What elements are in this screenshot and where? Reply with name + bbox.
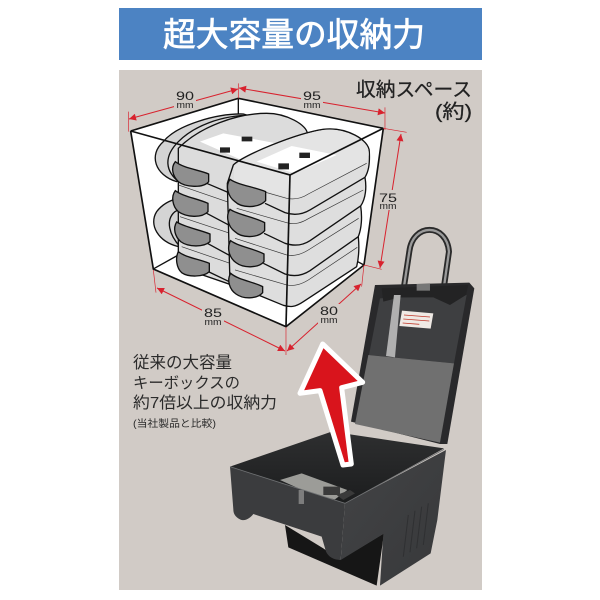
lid hinge bracket xyxy=(382,285,468,305)
cube back edges xyxy=(153,98,364,269)
heading: storage space xyxy=(356,79,472,123)
dimension label: 80 mm: mm xyxy=(320,315,338,326)
right outer face xyxy=(341,450,446,586)
dimension label: 95 mm: mm xyxy=(304,100,321,111)
dimension label: 75 mm: mm xyxy=(380,201,397,212)
dimension label: 80 mm: 80 xyxy=(320,304,338,318)
left stack seams xyxy=(178,185,232,263)
dimension label: 90 mm: mm xyxy=(176,100,194,111)
shackle xyxy=(404,230,449,287)
dimension label: 90 mm: 90 xyxy=(176,89,194,103)
underside shadow xyxy=(285,525,384,586)
right stack layer lines xyxy=(263,177,365,276)
dimension label: 85 mm: 85 xyxy=(204,306,222,320)
key box photo: open lid with shackle xyxy=(351,230,474,444)
diagram: storage cube with stacked key cases xyxy=(128,83,407,355)
clasp xyxy=(299,490,304,504)
text block: capacity comparison xyxy=(133,353,277,430)
right stack of key cases xyxy=(227,129,369,307)
interior xyxy=(230,432,444,503)
interior latch xyxy=(323,487,355,500)
text block: capacity comparison: (当社製品と比較) xyxy=(133,417,216,430)
dimension label: 80 mm xyxy=(318,304,340,326)
right stack top surface xyxy=(234,130,369,198)
heading: storage space: 収納スペース xyxy=(356,79,472,101)
right stack grey tabs xyxy=(228,179,266,298)
big red arrow xyxy=(300,344,363,465)
key box photo: base xyxy=(230,432,446,586)
panel: storage background xyxy=(119,70,482,590)
felt pad xyxy=(355,355,454,443)
dimension label: 75 mm xyxy=(377,190,399,212)
case label on right stack xyxy=(257,146,337,173)
dimension label: 75 mm: 75 xyxy=(379,191,397,205)
dimension label: 85 mm: mm xyxy=(204,317,222,328)
warning sticker xyxy=(399,311,433,329)
left outer face xyxy=(230,467,345,560)
dimension label: 95 mm xyxy=(301,89,323,111)
text block: capacity comparison: 従来の大容量 xyxy=(133,353,232,372)
lid inner recess xyxy=(369,295,467,363)
title banner xyxy=(119,8,482,60)
interior plate xyxy=(280,473,347,499)
dimension label: 90 mm xyxy=(174,88,196,111)
latch icon xyxy=(278,153,310,169)
dimension label: 85 mm xyxy=(202,306,224,328)
left stack back lobes xyxy=(154,114,307,247)
dimension label: 95 mm: 95 xyxy=(303,89,321,103)
heading: storage space: (約) xyxy=(435,101,472,123)
lid xyxy=(351,283,474,444)
latch plate xyxy=(417,284,430,291)
metal rod xyxy=(386,295,401,357)
text block: capacity comparison: キーボックスの xyxy=(133,374,240,392)
rim highlight xyxy=(230,449,444,503)
case label on left stack xyxy=(200,133,280,160)
left stack of key cases xyxy=(178,113,307,287)
left stack grey tabs xyxy=(173,162,210,276)
title text: 超大容量の収納力 xyxy=(163,16,425,53)
dimension lines xyxy=(128,83,407,355)
right stack seams xyxy=(234,163,367,285)
dimension arrows xyxy=(129,88,401,351)
cube front edges xyxy=(131,98,383,327)
latch icon xyxy=(220,137,252,153)
cube white interior xyxy=(131,98,383,327)
vent ribs xyxy=(403,503,428,557)
sticker red lines xyxy=(403,315,430,324)
text block: capacity comparison: 約7倍以上の収納力 xyxy=(133,394,277,412)
left stack layer lines xyxy=(207,183,233,283)
